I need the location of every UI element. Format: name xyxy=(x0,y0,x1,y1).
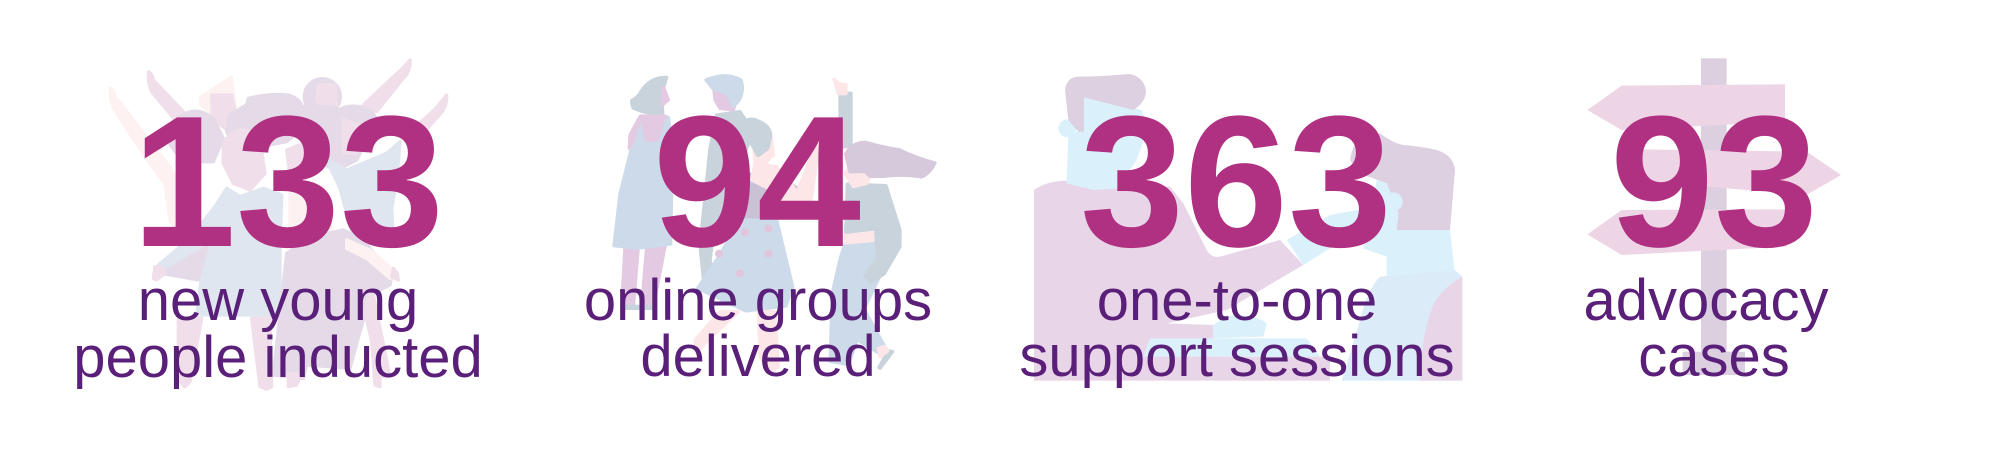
illustration: four friends standing together xyxy=(614,76,935,373)
panel: one-to-one support sessions xyxy=(1019,74,1462,389)
label: advocacy cases: advocacy xyxy=(1583,268,1829,333)
label: advocacy cases: cases xyxy=(1638,324,1790,389)
illustration: counsellor talking with a young person xyxy=(1034,74,1462,381)
label: new young people inducted: new young xyxy=(138,268,418,333)
label: new young people inducted xyxy=(73,268,483,390)
label: online groups delivered: online groups xyxy=(584,268,932,333)
panel: online groups delivered xyxy=(584,76,935,389)
label: new young people inducted: people inducted xyxy=(73,325,483,390)
number: 93: 93 xyxy=(1610,77,1818,286)
illustration: group of young people cheering xyxy=(110,60,447,389)
number: 133: 133 xyxy=(132,77,444,286)
label: one-to-one support sessions: support sessions xyxy=(1019,324,1455,389)
panel: advocacy cases xyxy=(1583,58,1841,389)
label: online groups delivered: delivered xyxy=(640,324,876,389)
label: one-to-one support sessions: one-to-one xyxy=(1097,268,1377,333)
illustration: signpost with three arrows xyxy=(1587,58,1841,375)
label: one-to-one support sessions xyxy=(1019,268,1455,389)
number: 94: 94 xyxy=(653,77,861,286)
label: advocacy cases xyxy=(1583,268,1829,389)
number: 363: 363 xyxy=(1080,77,1392,286)
panel: new young people inducted xyxy=(73,60,483,390)
label: online groups delivered xyxy=(584,268,932,389)
